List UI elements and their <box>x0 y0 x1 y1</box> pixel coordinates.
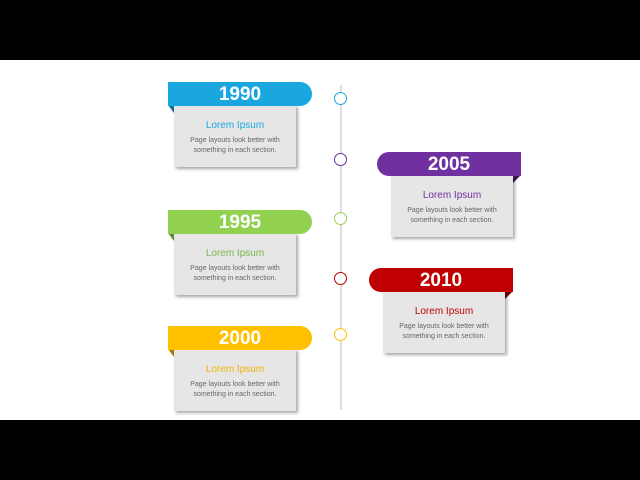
entry 2005: 2005 <box>428 154 470 175</box>
entry 1990: Page layouts look better with <box>190 137 280 144</box>
entry 1990: 1990 <box>219 84 261 105</box>
entry 2000: Lorem Ipsum <box>206 364 264 375</box>
entry 1990: something in each section. <box>194 147 276 154</box>
entry 2000: Page layouts look better with <box>190 381 280 388</box>
entry 2010: Lorem Ipsum <box>415 306 473 317</box>
entry 2005: Lorem Ipsum <box>423 190 481 201</box>
entry 1995: something in each section. <box>194 275 276 282</box>
timeline line <box>340 85 342 410</box>
entry 2010: 2010 <box>420 270 462 291</box>
entry 2005: Page layouts look better with <box>407 207 497 214</box>
entry 2010 <box>369 268 513 357</box>
entry 1995: Lorem Ipsum <box>206 248 264 259</box>
entry 2000: something in each section. <box>194 391 276 398</box>
entry 1990 <box>168 82 312 171</box>
entry 1995: 1995 <box>219 212 261 233</box>
entry 2010: Page layouts look better with <box>399 323 489 330</box>
entry 1995 <box>168 210 312 299</box>
entry 2005: something in each section. <box>411 217 493 224</box>
entry 2005 <box>377 152 521 241</box>
entry 2000: 2000 <box>219 328 261 349</box>
entry 2000 <box>168 326 312 415</box>
entry 2010: something in each section. <box>403 333 485 340</box>
entry 1995: Page layouts look better with <box>190 265 280 272</box>
entry 1990: Lorem Ipsum <box>206 120 264 131</box>
